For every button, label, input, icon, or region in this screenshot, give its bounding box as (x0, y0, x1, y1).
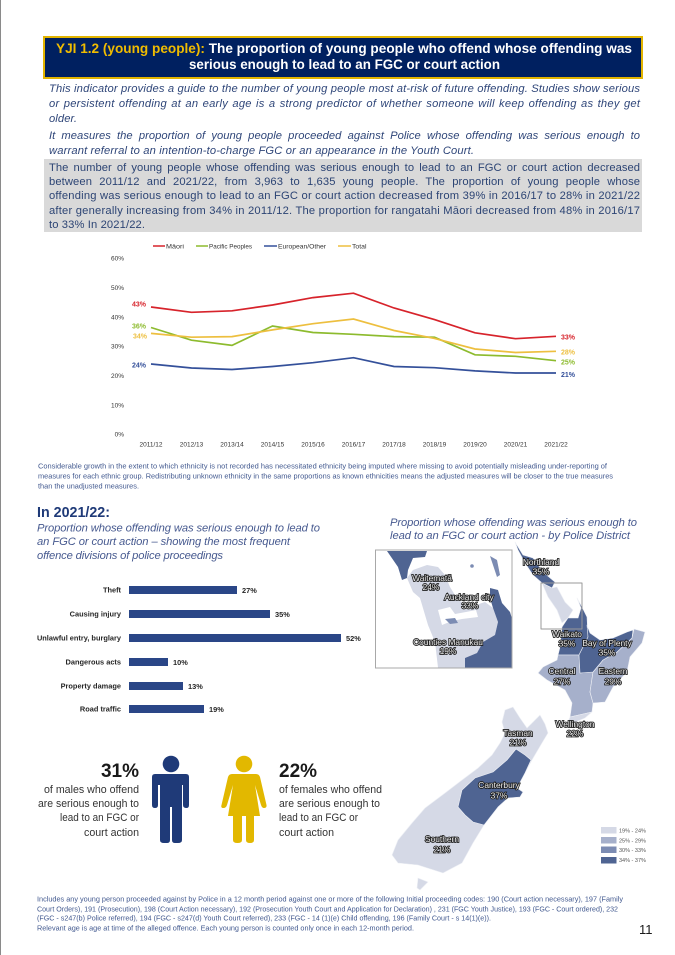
map labels: Tasman (503, 728, 533, 738)
data labels: 34% (133, 334, 148, 340)
region: Wellington (568, 712, 592, 723)
stat: females: of females who offend (279, 784, 382, 796)
x axis labels: 2021/22 (544, 442, 568, 448)
chart legend: Māori (166, 244, 184, 250)
map title (390, 517, 637, 542)
definitions footnote: Court Orders), 191 (Prosecution), 198 (Court Action necessary), 192 (Prosecution Youth Court and Application for Declaration) , 231 (FGC Youth Justice), 193 (FGC - Court ordered), 232 (37, 906, 618, 914)
data labels: 33% (561, 334, 576, 342)
intro text (49, 83, 641, 157)
y axis labels: 30% (111, 344, 124, 351)
map labels: 22% (567, 728, 584, 738)
region: Northland (515, 542, 555, 588)
map labels: 21% (434, 844, 451, 854)
x axis labels: 2020/21 (504, 442, 528, 448)
x axis labels: 2012/13 (180, 442, 204, 448)
y axis labels: 40% (111, 314, 124, 321)
summary panel: between 2011/12 and 2021/22, from 3,963 to 1,635 young people. The proportion of young people whose (49, 176, 640, 188)
inset: Waikato edge (465, 588, 512, 668)
chart legend: European/Other (278, 244, 327, 250)
intro text: older. (49, 113, 77, 125)
bar chart: offence divisions (37, 586, 361, 714)
stat: males (38, 761, 139, 839)
stat: males: court action (84, 827, 139, 839)
map: New Zealand police districts (392, 542, 645, 890)
map labels (412, 557, 632, 854)
x axis labels: 2018/19 (423, 442, 447, 448)
bar: Dangerous acts: 10% (173, 658, 188, 667)
heading: In 2021/22: In 2021/22: (37, 505, 110, 521)
map labels: 21% (510, 738, 527, 748)
inset: Māngere area (445, 618, 458, 624)
intro text: It measures the proportion of young people proceeded against Police whose offending was serious enough to (49, 130, 640, 142)
y axis labels (111, 256, 124, 438)
series: Pacific Peoples (151, 326, 556, 361)
title banner (44, 37, 642, 78)
x axis labels: 2016/17 (342, 442, 366, 448)
y axis labels: 50% (111, 285, 124, 292)
map labels: 35% (533, 566, 550, 576)
title banner: YJI 1.2 (young people): The proportion of young people who offend whose offending was (56, 41, 632, 56)
map labels: 35% (599, 648, 616, 658)
bar: Dangerous acts (66, 658, 188, 667)
ethnicity footnote (38, 464, 614, 490)
offence chart subtitle: an FGC or court action – showing the most frequent (37, 536, 291, 548)
map labels: Auckland city (444, 592, 494, 602)
bar: Property damage: 13% (188, 682, 203, 691)
stat: females: 22% (279, 761, 317, 782)
region: Stewart Island (417, 878, 428, 890)
summary panel (44, 159, 642, 232)
icon: female figure (221, 756, 267, 843)
map legend (601, 827, 646, 864)
map legend: 34% - 37% (619, 858, 646, 864)
chart legend (153, 244, 367, 250)
bar: Theft (103, 586, 257, 595)
x axis labels: 2019/20 (463, 442, 487, 448)
data labels: 24% (132, 362, 147, 370)
map labels: 24% (423, 582, 440, 592)
page number: 11 (639, 922, 652, 937)
map labels: 35% (559, 638, 576, 648)
inset: harbour gaps (438, 607, 478, 625)
intro text: warrant referral to an intention-to-charge FGC or an appearance in the Youth Court. (49, 145, 474, 157)
map labels: Counties Manukau (413, 637, 483, 647)
map labels: Central (548, 666, 576, 676)
data labels: 21% (561, 372, 576, 379)
data labels (132, 302, 576, 379)
stat: females: are serious enough to (279, 798, 380, 810)
summary panel: offending was serious enough to lead to an FGC or court action decreased from 39% in 2016/17 to 28% in 2021/22 (49, 190, 640, 202)
map legend: 30% - 33% (619, 848, 646, 854)
stat: males: are serious enough to (38, 798, 139, 810)
chart legend: Total (352, 244, 367, 250)
x axis labels: 2015/16 (301, 442, 325, 448)
region: Bay of Plenty (579, 625, 633, 673)
bar: Dangerous acts: Dangerous acts (66, 658, 121, 666)
map title: Proportion whose offending was serious enough to (390, 517, 637, 529)
map labels: Northland (523, 557, 559, 567)
map legend: 19% - 24% (619, 828, 646, 834)
bar: Unlawful entry, burglary (37, 634, 361, 643)
map labels: Wellington (556, 719, 595, 729)
bar: Road traffic (80, 704, 224, 714)
stat: males: lead to an FGC or (60, 812, 139, 824)
summary panel: to 33% In 2021/22. (49, 219, 145, 231)
map labels: Eastern (599, 666, 628, 676)
y axis labels: 60% (111, 256, 124, 262)
region: Auckland (542, 583, 573, 623)
ethnicity footnote: than the unadjusted measures. (38, 484, 139, 490)
map labels: 33% (462, 600, 479, 610)
region: Waikato (558, 598, 588, 655)
stat: females (279, 761, 382, 839)
y axis labels: 0% (115, 432, 124, 438)
map title: lead to an FGC or court action - by Police District (390, 530, 631, 542)
x axis labels: 2013/14 (220, 442, 244, 448)
line chart: proportion by ethnicity (111, 244, 576, 448)
bar: Causing injury: 35% (275, 610, 290, 619)
map labels: 27% (554, 676, 571, 686)
series: Māori (151, 293, 556, 339)
definitions footnote: Relevant age is age at time of the alleged offence. Each young person is counted only once in each 12-month period. (37, 926, 414, 932)
x axis labels: 2011/12 (139, 442, 163, 448)
bar: Unlawful entry, burglary: 52% (346, 634, 361, 643)
x axis labels (139, 442, 568, 448)
map labels: 19% (440, 646, 457, 656)
intro text: This indicator provides a guide to the number of young people most at-risk of future offending. Studies show serious (49, 83, 640, 95)
definitions footnote (37, 896, 624, 932)
definitions footnote: (FGC - s247(b) Police referred), 194 (FGC - s247(d) Youth Court referred), 233 (FGC - 14 (1)(e) Child offending, 196 (Family Court - s 14(1)(e)). (37, 916, 491, 922)
x axis labels: 2017/18 (382, 442, 406, 448)
map legend: 25% - 29% (619, 838, 646, 844)
summary panel: The number of young people whose offending was serious enough to lead to an FGC or court action decreased (49, 162, 640, 174)
map labels: Waitematā (412, 573, 452, 583)
y axis labels: 10% (111, 402, 124, 409)
summary panel: after generally increasing from 34% in 2011/12. The proportion for rangatahi Māori decreased from 48% in 2016/17 (49, 205, 640, 217)
icon: male figure (152, 756, 189, 843)
stat: males: 31% (101, 761, 139, 782)
inset: Waitematā north coast (387, 551, 427, 580)
series: Total (151, 319, 556, 352)
ethnicity footnote: measures for each ethnic group. Redistributing unknown ethnicity in the same proportions as known ethnicities means the adjusted measures will be closer to the true measures (38, 474, 614, 480)
bar: Road traffic: 19% (209, 705, 224, 714)
bar: Theft: 27% (242, 586, 257, 595)
intro text: or persistent offending at an early age is a strong predictor of whether someone will keep offending as they get (49, 98, 641, 110)
map labels: 37% (491, 790, 508, 800)
map labels: Canterbury (478, 780, 521, 790)
data labels: 43% (132, 302, 147, 308)
offence chart subtitle: Proportion whose offending was serious enough to lead to (37, 522, 320, 534)
region: Eastern (590, 629, 645, 703)
bar: Theft: Theft (103, 586, 122, 594)
map labels: Bay of Plenty (582, 638, 632, 648)
series: European/Other (151, 358, 556, 373)
region: Central (538, 655, 593, 717)
chart legend: Pacific Peoples (209, 244, 253, 250)
bar: Property damage (61, 682, 203, 691)
y axis labels: 20% (111, 373, 124, 380)
definitions footnote: Includes any young person proceeded against by Police in a 12 month period against one or more of the following Initial proceeding codes: 190 (Court action necessary), 197 (Family (37, 896, 624, 904)
offence chart subtitle (37, 522, 320, 562)
inset: Auckland urban area (407, 565, 498, 668)
inset: Waiheke (490, 556, 500, 577)
data labels: 36% (132, 324, 147, 330)
stat: females: court action (279, 827, 334, 839)
title banner: serious enough to lead to an FGC or court action (189, 57, 500, 72)
offence chart subtitle: offence divisions of police proceedings (37, 550, 223, 562)
data labels: 28% (561, 350, 576, 356)
bar: Road traffic: Road traffic (80, 704, 121, 714)
stat: males: of males who offend (44, 784, 139, 796)
map labels: 29% (605, 676, 622, 686)
map labels: Waikato (552, 629, 582, 639)
data labels: 25% (561, 360, 576, 366)
bar: Property damage: Property damage (61, 682, 121, 690)
stat: females: lead to an FGC or (279, 812, 358, 824)
region: Canterbury (458, 749, 531, 825)
bar: Causing injury (70, 610, 290, 619)
map labels: Southern (425, 834, 459, 844)
ethnicity footnote: Considerable growth in the extent to which ethnicity is not recorded has necessitated ethnicity being imputed where missing to avoid potentially misleading under-reporting of (38, 464, 607, 470)
bar: Unlawful entry, burglary: Unlawful entry, burglary (37, 634, 122, 642)
inset map: Auckland (376, 550, 512, 668)
region: Tasman and Southern (392, 707, 548, 873)
bar: Causing injury: Causing injury (70, 610, 122, 618)
x axis labels: 2014/15 (261, 442, 285, 448)
locator box (541, 583, 582, 629)
